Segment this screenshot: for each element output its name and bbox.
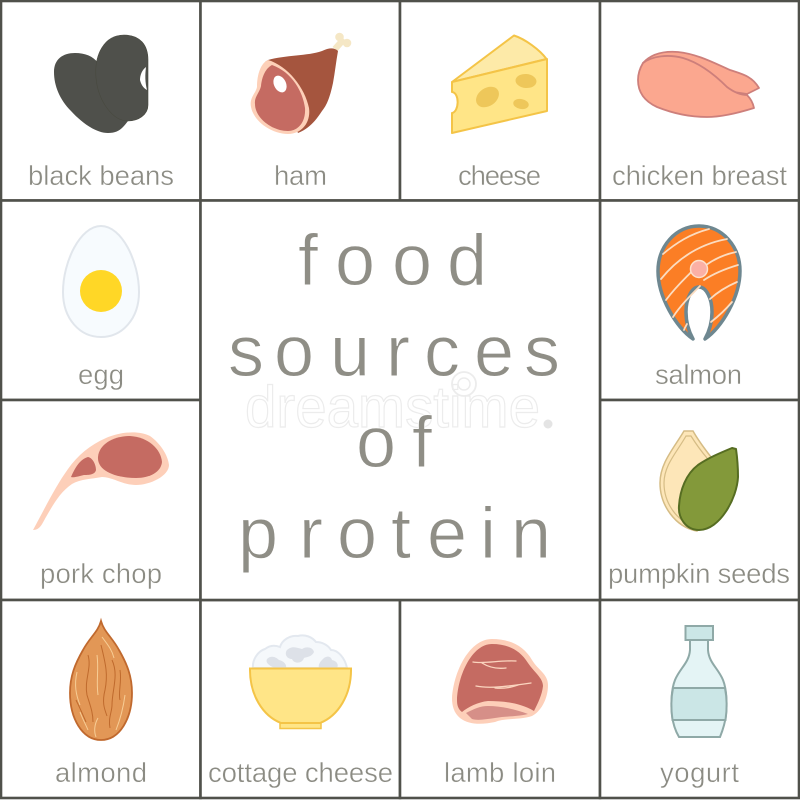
panel: cottage cheese [200,600,400,798]
label: black beans: black beans [28,160,174,191]
heading: food sources of protein [228,221,560,574]
label: lamb loin: lamb loin [444,757,556,788]
panel: black beans [1,1,200,200]
heading: food sources of protein: sources [228,312,560,392]
panel: chicken breast [600,1,799,200]
heading: food sources of protein: of [356,403,433,483]
icon: egg [63,226,139,337]
icon: lamb loin [452,639,548,724]
heading: food sources of protein: food [298,221,487,301]
heading: food sources of protein: protein [238,494,551,574]
panel: salmon [600,200,799,400]
panel: egg [1,200,200,400]
label: almond: almond [55,757,147,788]
panel: pumpkin seeds [600,400,799,600]
icon: black beans [54,35,148,133]
panel: ham [200,1,400,200]
icon: pork chop [33,432,169,530]
label: pork chop: pork chop [40,558,162,589]
icon: almond [70,621,132,740]
icon: cheese [452,36,547,133]
panel: cheese [400,1,600,200]
label: cheese: cheese [458,160,541,191]
panel: yogurt [600,600,799,798]
label: salmon: salmon [655,359,742,390]
icon: chicken breast [638,52,759,117]
panel: pork chop [1,400,200,600]
panel: almond [1,600,200,798]
icon: salmon [658,226,740,339]
label: egg: egg [78,359,124,390]
label: ham: ham [274,160,327,191]
label: yogurt: yogurt [660,757,739,788]
icon: yogurt [671,626,727,737]
panel: title [200,200,600,600]
watermark: dreamstime [245,375,540,440]
label: pumpkin seeds: pumpkin seeds [608,558,790,589]
icon: cottage cheese [250,635,351,728]
label: cottage cheese: cottage cheese [208,757,393,788]
label: chicken breast: chicken breast [612,160,787,191]
icon: pumpkin seeds [660,431,738,531]
panel: lamb loin [400,600,600,798]
icon: ham [251,33,351,134]
